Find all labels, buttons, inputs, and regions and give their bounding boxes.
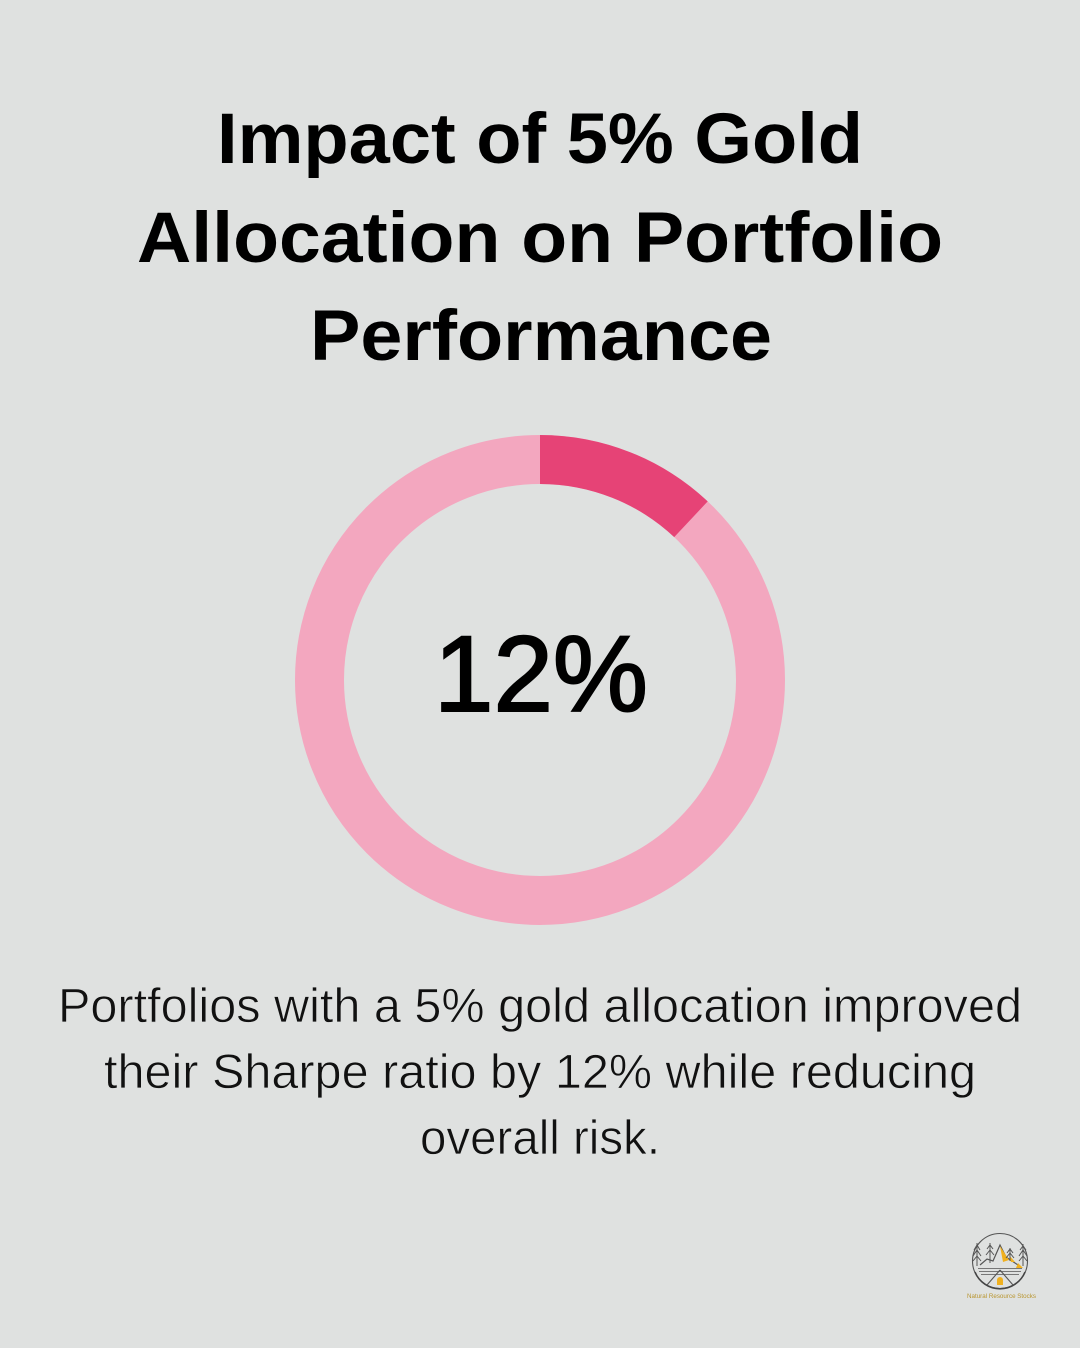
description text: Portfolios with a 5% gold allocation improved xyxy=(58,980,1022,1033)
description text: their Sharpe ratio by 12% while reducing xyxy=(104,1046,976,1099)
logo ring xyxy=(972,1234,1028,1288)
logo wordmark: Natural Resource Stocks xyxy=(967,1293,1036,1300)
description text: overall risk. xyxy=(420,1112,660,1165)
logo trees xyxy=(973,1243,1027,1266)
donut highlighted segment xyxy=(540,435,708,537)
logo: Natural Resource Stocks xyxy=(967,1234,1036,1300)
logo water lines xyxy=(978,1268,1022,1274)
description text xyxy=(58,980,1022,1165)
title xyxy=(137,100,943,376)
title: Impact of 5% Gold xyxy=(217,100,863,179)
logo tent xyxy=(987,1270,1013,1285)
logo mountains xyxy=(980,1245,1021,1267)
donut chart: 12% xyxy=(320,435,760,900)
title: Performance xyxy=(310,297,772,376)
donut centre value: 12% xyxy=(434,613,648,734)
title: Allocation on Portfolio xyxy=(137,199,943,278)
donut track xyxy=(320,460,760,900)
